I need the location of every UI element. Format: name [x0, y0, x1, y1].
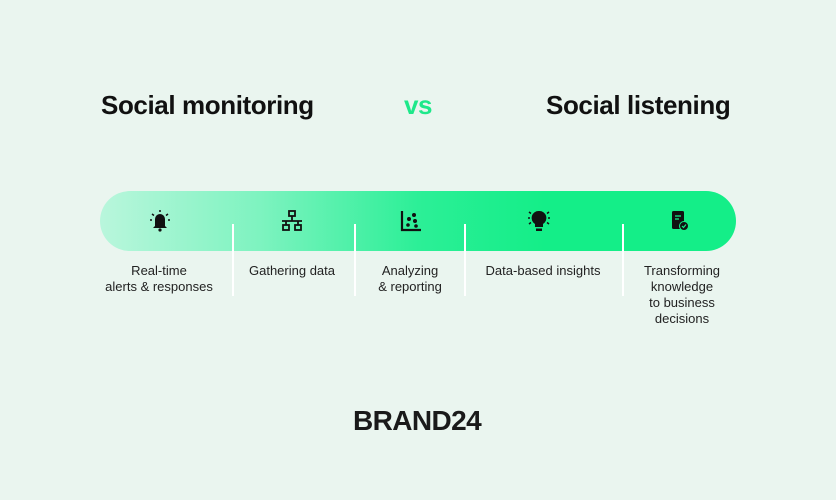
label: real-time alerts: alerts & responses: [105, 279, 213, 294]
icon: bell: [150, 210, 170, 232]
label: real-time alerts: Real-time: [131, 263, 187, 278]
label: analyzing: & reporting: [378, 279, 442, 294]
label: transforming: knowledge: [651, 279, 713, 294]
title: social monitoring: Social monitoring: [101, 90, 314, 120]
icon: lightbulb: [528, 211, 550, 231]
label: insights: Data-based insights: [486, 263, 600, 278]
label: transforming: decisions: [655, 311, 709, 326]
icon: scatter chart: [400, 211, 421, 232]
logo: BRAND24: [353, 405, 481, 436]
icon: network: [282, 210, 302, 231]
icon: document check: [672, 211, 688, 230]
vs: vs: [404, 90, 432, 120]
label: transforming: to business: [649, 295, 715, 310]
title: social listening: Social listening: [546, 90, 730, 120]
label: transforming: Transforming: [644, 263, 720, 278]
label: analyzing: Analyzing: [382, 263, 438, 278]
label: gathering data: Gathering data: [249, 263, 335, 278]
label: analyzing: [378, 263, 442, 294]
gradient bar: [100, 191, 736, 251]
label: real-time alerts: [105, 263, 213, 294]
label: transforming: [644, 263, 720, 326]
